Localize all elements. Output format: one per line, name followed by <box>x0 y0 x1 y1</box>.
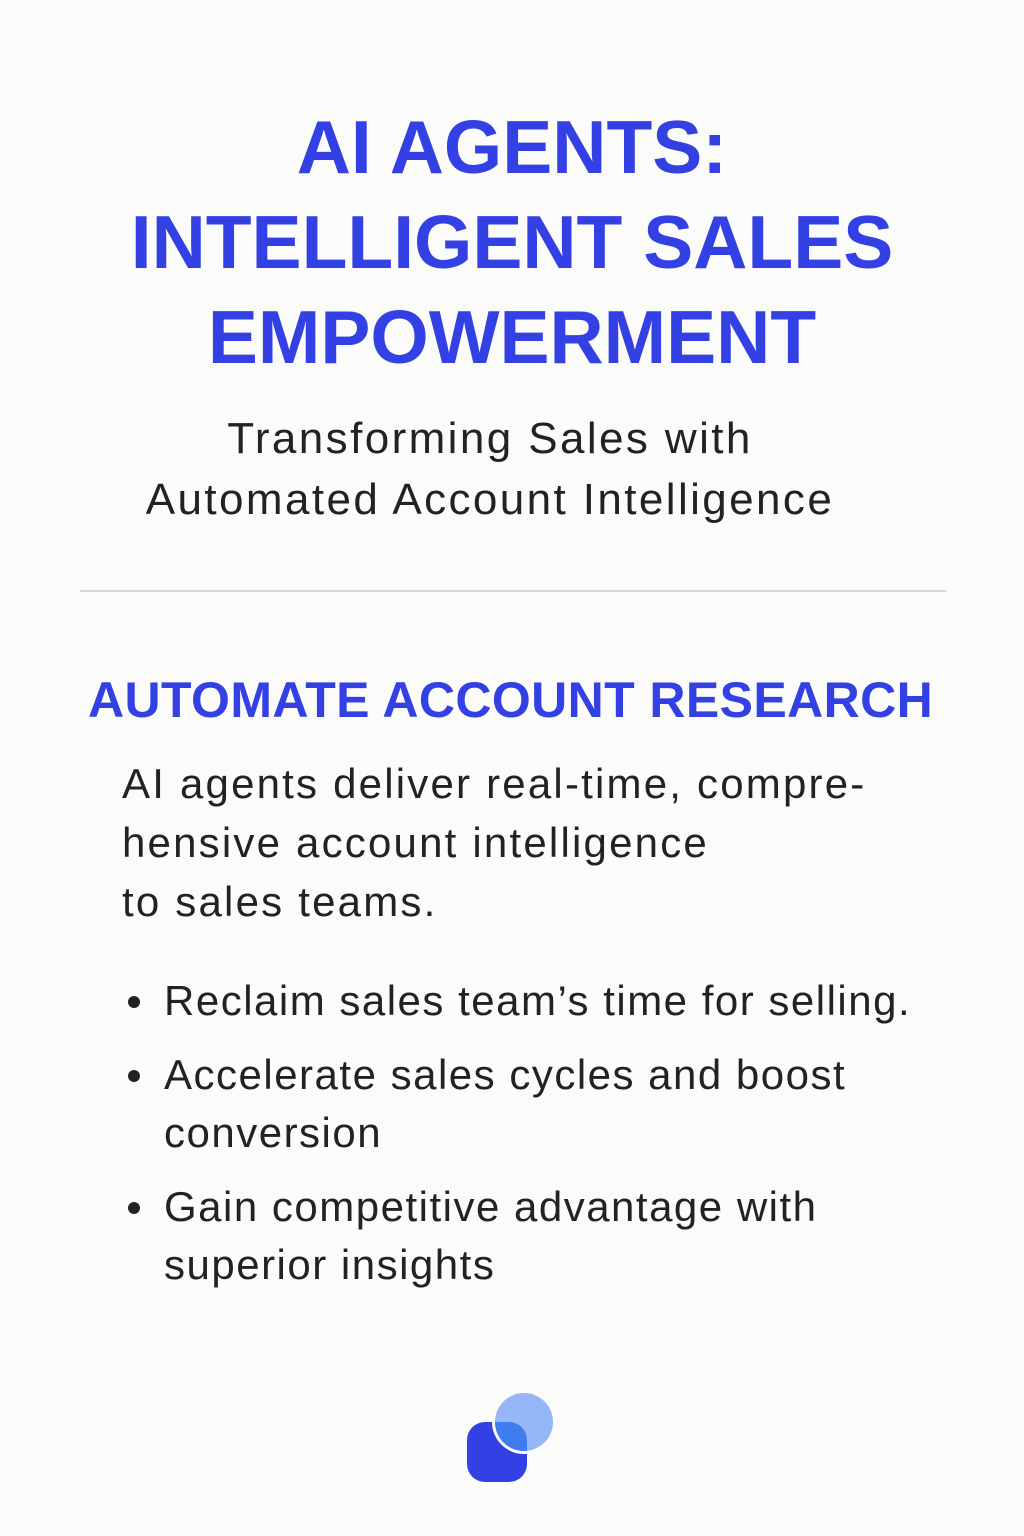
subtitle: Automated Account Intelligence <box>146 475 834 524</box>
body text: hensive account intelligence <box>122 819 709 866</box>
subtitle <box>146 414 834 524</box>
title: AI AGENTS: <box>297 105 727 189</box>
bullet 2 <box>128 1051 846 1156</box>
title: EMPOWERMENT <box>208 295 816 379</box>
subtitle: Transforming Sales with <box>227 414 753 463</box>
bullet 2: Accelerate sales cycles and boost <box>164 1051 846 1098</box>
title: INTELLIGENT SALES <box>131 200 893 284</box>
title <box>131 105 893 379</box>
icon: logo <box>467 1393 553 1482</box>
body text: AI agents deliver real-time, compre- <box>122 760 866 807</box>
bullet 3: Gain competitive advantage with <box>164 1183 818 1230</box>
bullet 3 <box>128 1183 818 1288</box>
body text <box>122 760 866 925</box>
body text: to sales teams. <box>122 878 437 925</box>
bullet 3: superior insights <box>164 1241 495 1288</box>
section heading: AUTOMATE ACCOUNT RESEARCH <box>88 672 933 728</box>
bullet 1: Reclaim sales team’s time for selling. <box>164 977 911 1024</box>
bullet 2: conversion <box>164 1109 382 1156</box>
